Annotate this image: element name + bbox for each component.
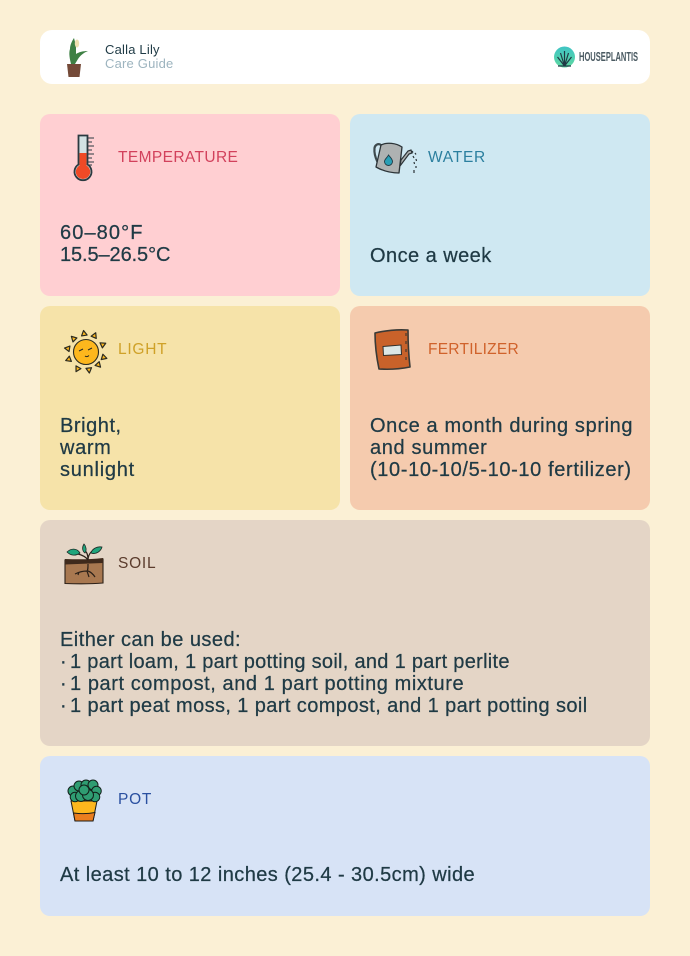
title: Calla Lily Care Guide: Calla Lily bbox=[105, 42, 160, 56]
text: soil mixtures: · 1 part loam, 1 part potting soil, and 1 part perlite bbox=[60, 651, 510, 673]
text: light needs bbox=[60, 415, 135, 481]
text: light needs: Bright, bbox=[60, 415, 122, 437]
text: soil mixtures bbox=[60, 629, 588, 717]
text: light needs: warm bbox=[60, 437, 112, 459]
text: fertilizer schedule bbox=[370, 415, 633, 481]
panel: soil bbox=[40, 520, 650, 746]
text: temperature range: 60–80°F bbox=[60, 222, 144, 244]
title: Calla Lily Care Guide: Care Guide bbox=[105, 56, 173, 70]
header bar bbox=[40, 30, 650, 84]
text: soil mixtures: Either can be used: bbox=[60, 629, 241, 651]
text: water frequency: Once a week bbox=[370, 244, 492, 266]
label: soil: SOIL bbox=[118, 555, 156, 572]
label: pot: POT bbox=[118, 791, 152, 808]
icon: sun bbox=[64, 330, 108, 374]
label: temperature: TEMPERATURE bbox=[118, 149, 238, 166]
panel: water bbox=[350, 114, 650, 296]
icon: seedling in soil bbox=[64, 543, 104, 584]
icon: fertilizer bag bbox=[374, 329, 411, 370]
icon: potted plant bbox=[68, 780, 102, 822]
panel: light bbox=[40, 306, 340, 510]
icon: watering can bbox=[373, 142, 418, 174]
panel: pot bbox=[40, 756, 650, 916]
label: light: LIGHT bbox=[118, 341, 167, 358]
text: temperature range: 15.5–26.5°C bbox=[60, 244, 170, 266]
text: pot size: At least 10 to 12 inches (25.4 - 30.5cm) wide bbox=[60, 864, 475, 886]
logo: Houseplantis: HOUSEPLANTIS bbox=[579, 49, 638, 64]
panel: fertilizer bbox=[350, 306, 650, 510]
text: soil mixtures: · 1 part peat moss, 1 part compost, and 1 part potting soil bbox=[60, 695, 588, 717]
text: light needs: sunlight bbox=[60, 459, 135, 481]
panel: temperature bbox=[40, 114, 340, 296]
icon: thermometer bbox=[74, 134, 94, 182]
text: fertilizer schedule: and summer bbox=[370, 437, 487, 459]
text: temperature range bbox=[60, 222, 170, 266]
label: fertilizer: FERTILIZER bbox=[428, 341, 519, 358]
icon: potted calla lily bbox=[67, 38, 88, 77]
label: water: WATER bbox=[428, 149, 486, 166]
text: fertilizer schedule: Once a month during spring bbox=[370, 415, 633, 437]
title: Calla Lily Care Guide bbox=[105, 42, 173, 70]
logo: Houseplantis bbox=[554, 46, 638, 68]
text: soil mixtures: · 1 part compost, and 1 part potting mixture bbox=[60, 673, 464, 695]
text: fertilizer schedule: (10-10-10/5-10-10 fertilizer) bbox=[370, 459, 632, 481]
